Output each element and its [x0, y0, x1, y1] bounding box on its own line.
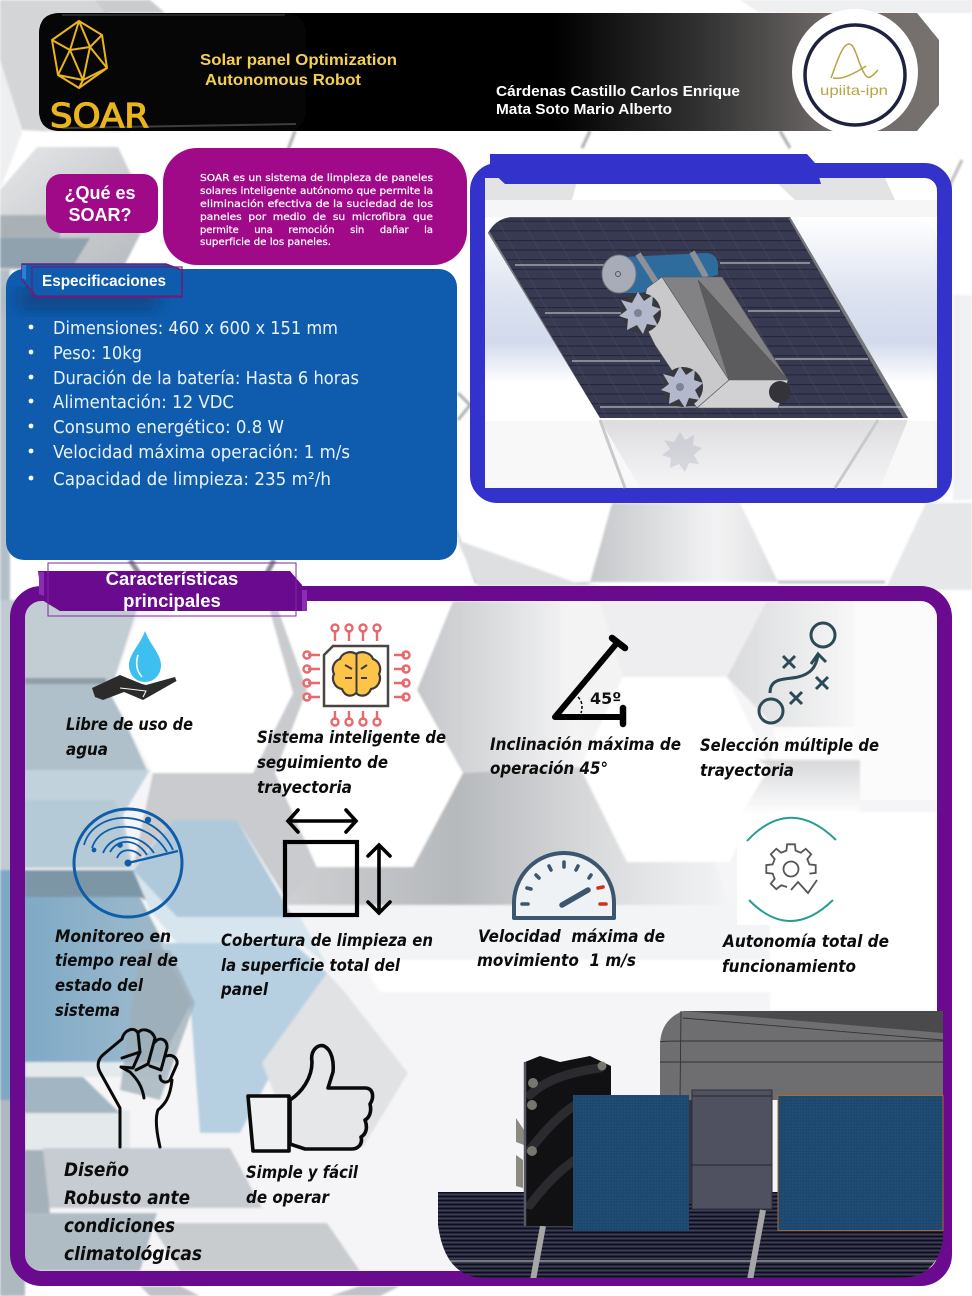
banner: Características principales: Características: [106, 568, 238, 589]
banner: Características principales: [38, 563, 307, 616]
feature: inclination: [490, 638, 681, 778]
feature: path selection: trayectoria: [700, 761, 794, 780]
panel: description: [163, 148, 467, 265]
feature: smart tracking: seguimiento de: [257, 753, 388, 772]
callout: ¿Qué es SOAR?: ¿Qué es: [64, 183, 136, 203]
SOAR wordmark: SOAR: [50, 96, 149, 135]
specification list: Velocidad máxima operación: 1 m/s: [53, 442, 350, 463]
icon: SOAR polyhedron logo: [52, 21, 107, 88]
feature: simple to operate: de operar: [246, 1188, 330, 1207]
panel: description: SOAR es un sistema de limpieza de paneles: [200, 173, 433, 184]
callout: ¿Qué es SOAR?: SOAR?: [68, 205, 132, 225]
panel: description: paneles por medio de su microfibra que: [200, 212, 433, 223]
feature: smart tracking: trayectoria: [257, 778, 352, 797]
feature: coverage: la superficie total del: [221, 956, 400, 975]
specification list: Dimensiones: 460 x 600 x 151 mm: [53, 318, 338, 339]
image: robot on solar panel: [480, 210, 937, 488]
icon: water drop in hand: [92, 631, 176, 700]
authors: Mata Soto Mario Alberto: [496, 102, 672, 118]
feature: simple to operate: Simple y fácil: [246, 1163, 358, 1182]
icon: gear in arcs: [737, 814, 847, 925]
feature: maximum speed: [477, 853, 665, 970]
feature: monitoring: sistema: [55, 1001, 120, 1020]
feature: path selection: Selección múltiple de: [700, 736, 879, 755]
banner: Especificaciones: Especificaciones: [42, 273, 166, 290]
specification list: [29, 318, 359, 490]
reflection: [662, 432, 702, 472]
icon: 45 degree angle: [555, 638, 625, 724]
feature: robust design: climatológicas: [64, 1243, 202, 1265]
feature: inclination: operación 45°: [490, 759, 608, 778]
specification list: Capacidad de limpieza: 235 m²/h: [53, 469, 331, 490]
feature: autonomy: funcionamiento: [722, 957, 856, 976]
feature: maximum speed: Velocidad máxima de: [478, 927, 665, 946]
mecanum wheel: [516, 1056, 611, 1226]
feature: water free: [66, 631, 193, 759]
feature: robust design: condiciones: [64, 1215, 175, 1237]
icon: square with arrows: [285, 810, 390, 915]
feature: monitoring: Monitoreo en: [55, 927, 171, 946]
feature: robust design: [64, 1029, 202, 1265]
icon: thumbs up: [248, 1046, 373, 1151]
icon: chip with brain: [304, 624, 410, 726]
specification list: Consumo energético: 0.8 W: [53, 417, 284, 438]
feature: monitoring: estado del: [55, 976, 143, 995]
feature: autonomy: [721, 814, 889, 976]
feature: coverage: panel: [220, 980, 268, 999]
title: Autonomous Robot: [205, 72, 362, 89]
logo: upiita-ipn: upiita-ipn: [820, 82, 888, 98]
microfiber right: [778, 1096, 943, 1230]
feature: water free: Libre de uso de: [66, 715, 193, 734]
feature: smart tracking: [257, 624, 446, 797]
icon: raised fist: [98, 1029, 177, 1147]
panel: main features frame: [18, 563, 944, 1278]
feature: water free: agua: [66, 740, 108, 759]
solar panel: [488, 217, 908, 418]
banner: empty blue ribbon: [490, 154, 821, 184]
panel: description: eliminación efectiva de la suciedad de los: [200, 198, 433, 210]
panel: description: solares inteligente autónomo que permite la: [200, 185, 433, 197]
cleaning roll: [602, 252, 718, 293]
left logo plate: [39, 13, 306, 135]
feature: autonomy: Autonomía total de: [721, 932, 889, 951]
feature: robust design: Robusto ante: [64, 1187, 190, 1209]
banner: Características principales: principales: [123, 590, 221, 611]
central bracket: [689, 1090, 772, 1209]
specification list: Peso: 10kg: [53, 343, 142, 364]
image: robot side view: [438, 1011, 943, 1280]
icon: play strategy: [759, 623, 835, 723]
panel: specifications: [6, 264, 457, 560]
panel: robot render frame: [478, 154, 944, 496]
callout: ¿Qué es SOAR?: [46, 174, 158, 233]
feature: robust design: Diseño: [64, 1159, 129, 1181]
banner: Especificaciones: [22, 264, 182, 297]
feature: monitoring: tiempo real de: [55, 951, 178, 970]
icon: speedometer: [514, 853, 614, 918]
authors: [496, 84, 740, 118]
icon: radar: [74, 809, 182, 917]
feature: coverage: [220, 810, 433, 999]
feature: inclination: Inclinación máxima de: [490, 735, 681, 754]
icon: 45 degree angle: 45º: [590, 689, 621, 708]
feature: maximum speed: movimiento 1 m/s: [477, 951, 636, 970]
feature: path selection: [700, 623, 879, 780]
logo: upiita-ipn: [792, 9, 918, 135]
solar panel strip: [438, 1192, 943, 1280]
feature: coverage: Cobertura de limpieza en: [221, 931, 433, 950]
specification list: Alimentación: 12 VDC: [53, 392, 234, 413]
panel: description: permite una remoción sin dañar la: [200, 224, 433, 236]
panel: description: superficie de los paneles.: [200, 237, 331, 248]
feature: monitoring: [55, 809, 182, 1020]
specification list: Duración de la batería: Hasta 6 horas: [53, 368, 359, 389]
robot body: [640, 277, 788, 408]
authors: Cárdenas Castillo Carlos Enrique: [496, 84, 740, 100]
microfiber left: [573, 1095, 689, 1231]
title: Solar panel Optimization: [200, 52, 397, 69]
title: [200, 52, 397, 89]
header bar: [39, 9, 939, 135]
mecanum wheels: [619, 292, 791, 408]
feature: smart tracking: Sistema inteligente de: [257, 728, 446, 747]
feature: simple to operate: [246, 1046, 373, 1207]
robot housing: [660, 1011, 943, 1100]
